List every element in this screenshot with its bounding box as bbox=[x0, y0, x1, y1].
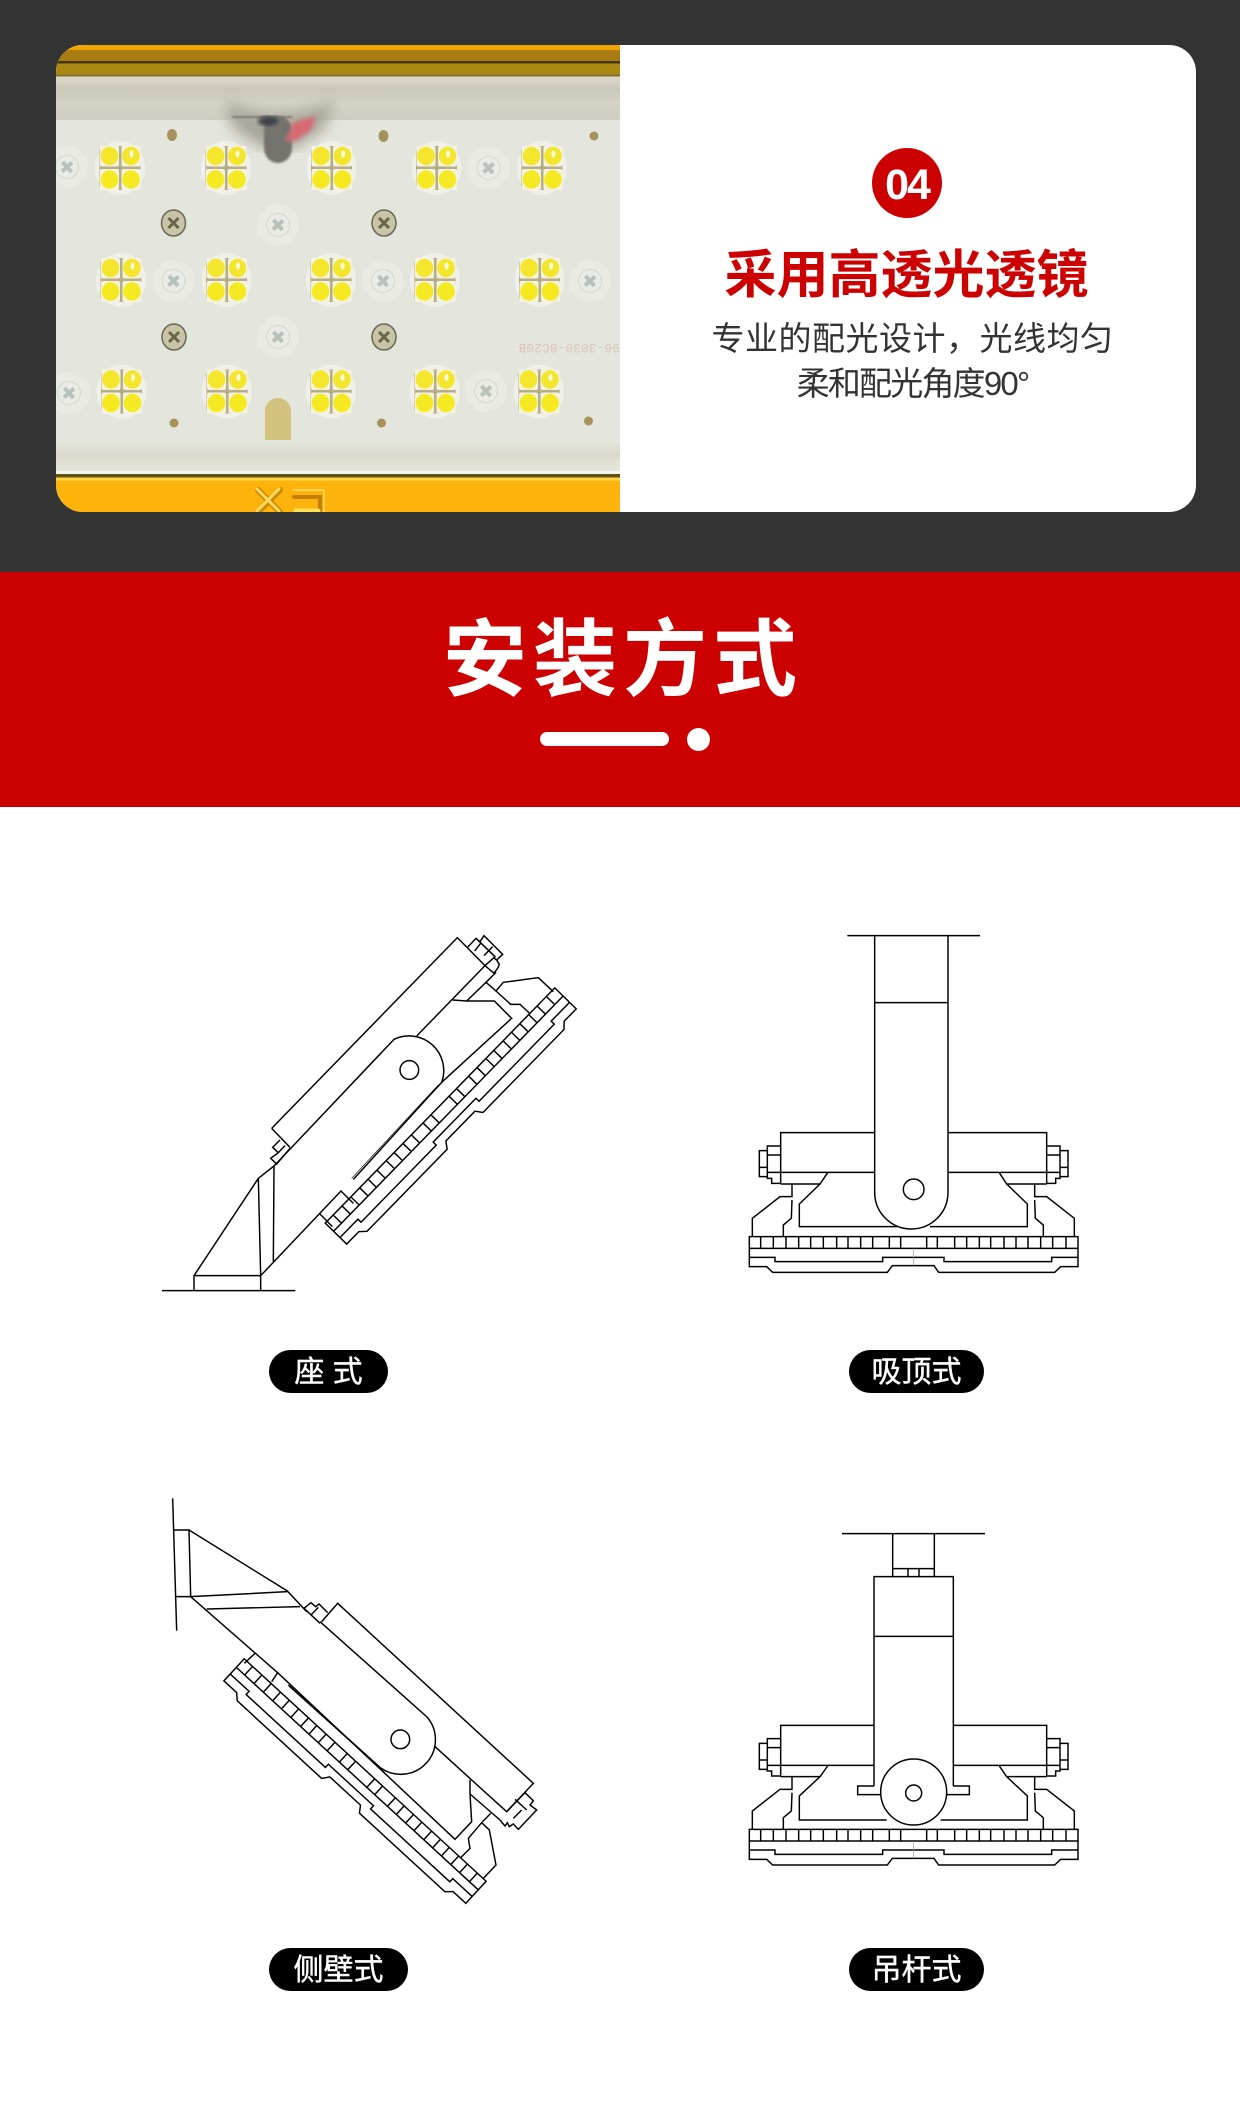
label: floor mount bbox=[269, 1350, 388, 1393]
lamp strip and lens profile bbox=[749, 1829, 1078, 1865]
dark top section background bbox=[0, 0, 1240, 572]
wire entry hole bbox=[225, 100, 335, 163]
title underline bar bbox=[540, 732, 669, 746]
pivot arm bbox=[191, 1597, 435, 1774]
photo base board bbox=[56, 45, 620, 512]
diagram: ceiling mount bbox=[748, 934, 1079, 1274]
lamp body bbox=[781, 1173, 1047, 1227]
text: lens description bbox=[712, 320, 1114, 402]
floor bracket bbox=[194, 1166, 274, 1291]
LED row 2 bbox=[96, 253, 564, 307]
diagram: pendant rod mount bbox=[748, 1532, 1079, 1866]
title underline dot bbox=[687, 728, 710, 751]
label: ceiling mount: 吸顶式 bbox=[872, 1356, 962, 1389]
embossed logo on housing bbox=[257, 489, 324, 512]
clamp bar bbox=[322, 1603, 533, 1820]
LED row 1 bbox=[95, 141, 567, 195]
pivot arm bbox=[261, 1036, 444, 1276]
nuts bbox=[759, 1739, 1068, 1776]
lamp strip and lens profile bbox=[749, 1237, 1078, 1272]
pivot disc bbox=[881, 1759, 947, 1825]
badge: number 04: 04 bbox=[885, 161, 929, 209]
lamp strip and lens profile bbox=[220, 1659, 486, 1907]
label: pendant rod mount bbox=[849, 1948, 984, 1991]
lamp strip and lens profile bbox=[325, 988, 580, 1248]
white gasket line bbox=[56, 471, 620, 474]
small mounting dots bbox=[167, 129, 598, 428]
metal screws bbox=[162, 210, 396, 350]
printed board code: 96-3030-8C20B bbox=[518, 340, 620, 355]
clamp bar bbox=[272, 938, 485, 1147]
rod body bbox=[858, 1577, 969, 1795]
LED row 3 bbox=[96, 364, 564, 418]
panel: lens feature card bbox=[56, 45, 1196, 512]
rod neck bbox=[893, 1534, 934, 1577]
label: pendant rod mount: 吊杆式 bbox=[872, 1954, 962, 1987]
clamp bars bbox=[781, 1725, 1047, 1765]
wall bracket bbox=[174, 1530, 307, 1612]
lower lens lip bbox=[56, 438, 620, 472]
nuts: upper end bbox=[467, 936, 503, 973]
upper lens lip bbox=[56, 76, 620, 120]
label: ceiling mount bbox=[849, 1350, 984, 1393]
diagram: floor mount bbox=[162, 934, 578, 1292]
bottom wire slot bbox=[265, 398, 291, 440]
clamp bars bbox=[781, 1133, 1047, 1172]
upper yellow housing rail bbox=[56, 45, 620, 76]
wall line bbox=[173, 1498, 177, 1631]
nuts bbox=[759, 1146, 1068, 1183]
photo: LED module close-up bbox=[56, 45, 620, 512]
nuts: lower end bbox=[500, 1793, 537, 1829]
text: lens description: 柔和配光角度90° bbox=[797, 365, 1028, 402]
side fins bbox=[752, 1184, 1074, 1237]
label: wall mount bbox=[269, 1948, 408, 1991]
heading: lens feature: 采用高透光透镜 bbox=[724, 247, 1088, 305]
white screws bbox=[46, 146, 611, 414]
title: 安装方式 bbox=[443, 613, 803, 707]
nuts: upper end bbox=[304, 1603, 328, 1623]
side fins bbox=[752, 1777, 1074, 1829]
badge: number 04 bbox=[872, 148, 942, 218]
lamp housing rear fin bbox=[278, 1673, 496, 1878]
label: wall mount: 侧壁式 bbox=[294, 1954, 384, 1987]
text: lens description: 专业的配光设计，光线均匀 bbox=[712, 320, 1114, 357]
ceiling line bbox=[842, 1531, 985, 1536]
nuts: lower end bbox=[271, 1140, 290, 1164]
lamp housing rear fin bbox=[442, 972, 553, 1082]
lower yellow housing rail bbox=[56, 474, 620, 512]
lamp body bbox=[781, 1766, 1047, 1820]
banner: installation heading bbox=[0, 572, 1240, 807]
floor line bbox=[162, 1288, 295, 1293]
ceiling line bbox=[847, 933, 980, 938]
diagram: wall mount bbox=[172, 1498, 538, 1904]
mounting arm bbox=[875, 936, 948, 1229]
label: floor mount: 座 式 bbox=[294, 1356, 363, 1389]
